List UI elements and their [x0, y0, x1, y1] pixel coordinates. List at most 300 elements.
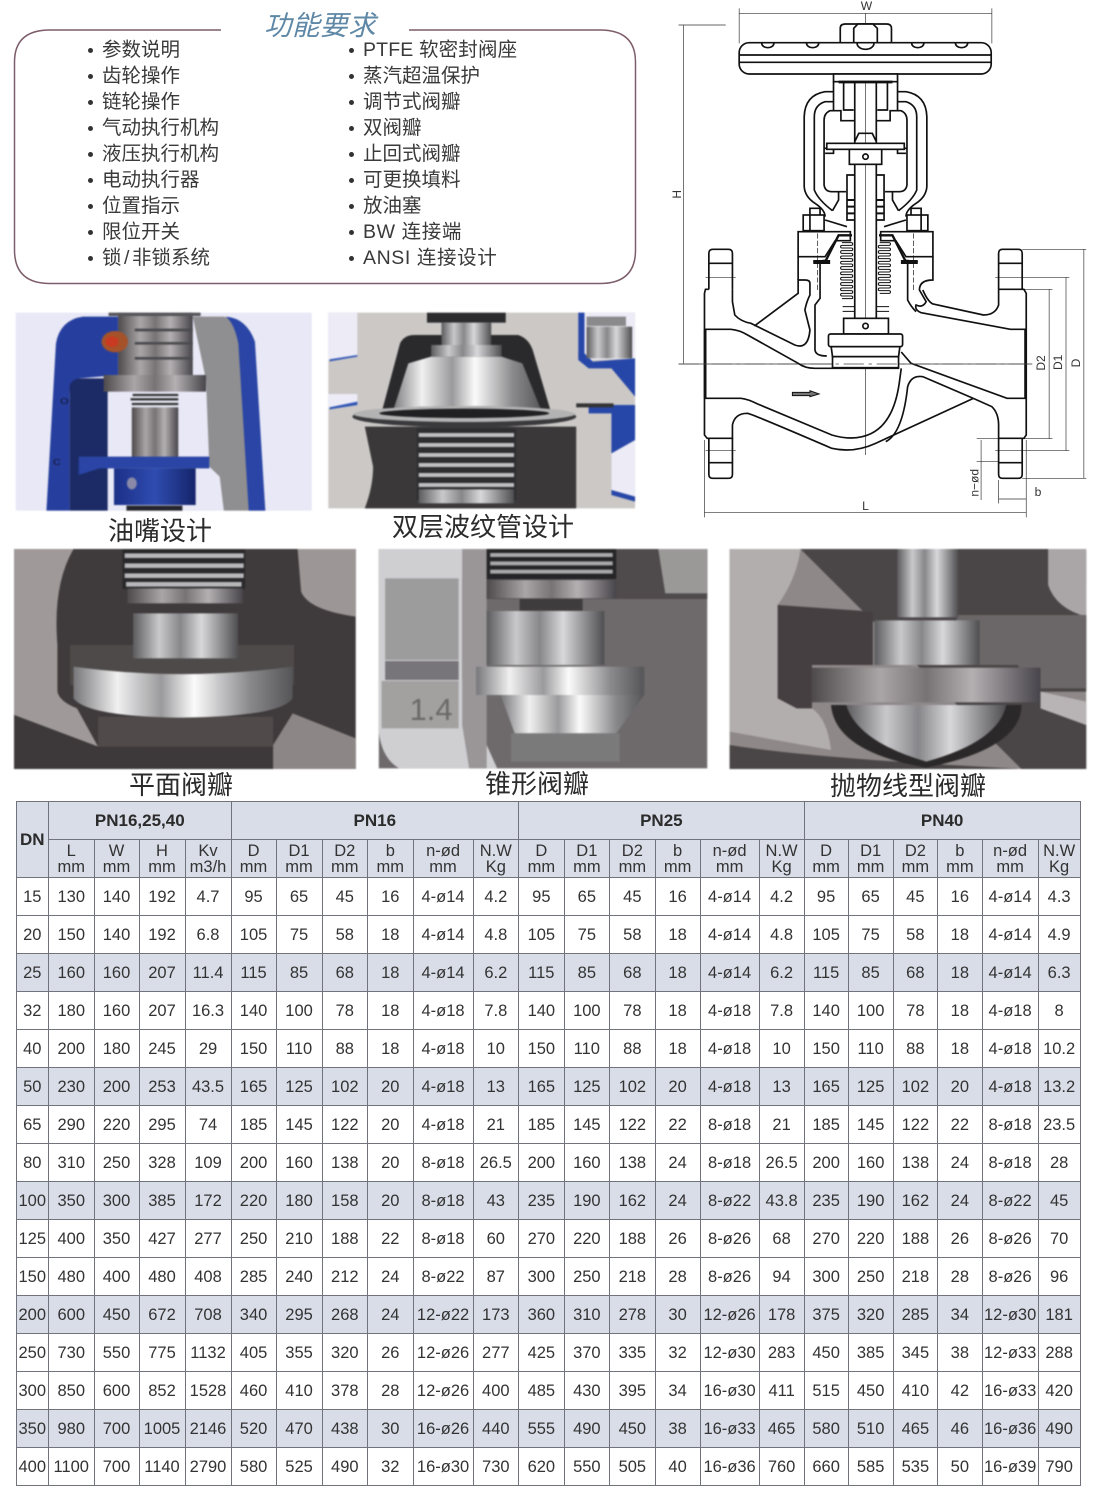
list: right column options: 放油塞	[363, 195, 422, 217]
row: DN 50: 13	[487, 1078, 505, 1096]
row: DN 15: 95	[244, 888, 263, 906]
row: DN 300: 410	[902, 1382, 929, 1400]
row: DN 350: 555	[528, 1420, 555, 1438]
row: DN 40: 110	[286, 1040, 312, 1058]
table header: columns and units: Kg	[486, 858, 506, 876]
row: DN 80: 20	[381, 1154, 399, 1172]
row: DN 250: 12-ø33	[984, 1344, 1036, 1362]
row: DN 15: 45	[336, 888, 354, 906]
row: DN 100: 162	[902, 1192, 929, 1210]
row: DN 250: 405	[240, 1344, 267, 1362]
row: DN 400: 1100	[54, 1458, 89, 1476]
row: DN 80: 328	[148, 1154, 176, 1172]
table header: columns and units: mm	[996, 858, 1024, 876]
caption: conical valve disc: 锥形阀瓣	[485, 769, 589, 799]
row: DN 300: 430	[573, 1382, 601, 1400]
list: right column options: 双阀瓣	[363, 117, 422, 139]
row: DN 150: 24	[381, 1268, 399, 1286]
row: DN 350: 438	[331, 1420, 359, 1438]
row: DN 65: 21	[487, 1116, 505, 1134]
row: DN 80: 24	[668, 1154, 687, 1172]
photo row: oil nozzle and double bellows	[16, 312, 636, 512]
row: DN 350: 580	[812, 1420, 840, 1438]
row: DN 65	[23, 1116, 1075, 1134]
row: DN 150: 96	[1050, 1268, 1068, 1286]
row: DN 300: 28	[381, 1382, 399, 1400]
row: DN 65: 220	[103, 1116, 130, 1134]
row: DN 15: 4-ø14	[708, 888, 751, 906]
row: DN 125: 26	[668, 1230, 687, 1248]
table header: pressure groups: PN16,25,40	[95, 811, 185, 830]
row: DN 80: 138	[619, 1154, 646, 1172]
row: DN 80: 8-ø18	[989, 1154, 1032, 1172]
row: DN 32	[23, 1002, 1064, 1020]
row: DN 125: 188	[331, 1230, 359, 1248]
table header: columns and units: mm	[103, 858, 130, 876]
row: DN 400: 700	[103, 1458, 130, 1476]
row: DN 50: 20	[381, 1078, 399, 1096]
row: DN 40: 150	[528, 1040, 555, 1058]
row: DN 300: 34	[668, 1382, 687, 1400]
photo row: valve discs	[13, 548, 1088, 770]
row: DN 65: 8-ø18	[708, 1116, 751, 1134]
row: DN 125: 8-ø26	[708, 1230, 751, 1248]
row: DN 25: 6.2	[770, 964, 793, 982]
table header: columns and units: H	[156, 842, 168, 860]
row: DN 80: 310	[57, 1154, 85, 1172]
row: DN 350: 350	[18, 1420, 46, 1438]
row: DN 350: 16-ø36	[984, 1420, 1036, 1438]
row: DN 200: 285	[902, 1306, 929, 1324]
table header: pressure groups: PN40	[921, 811, 963, 830]
dimension labels: n−ød	[967, 469, 981, 497]
row: DN 80: 250	[103, 1154, 130, 1172]
row: DN 20: 6.8	[197, 926, 219, 944]
row: DN 300: 420	[1045, 1382, 1073, 1400]
row: DN 20: 4-ø14	[708, 926, 751, 944]
table header: columns and units: N.W	[480, 842, 512, 860]
row: DN 20: 105	[528, 926, 555, 944]
row: DN 300: 850	[57, 1382, 85, 1400]
row: DN 100: 172	[194, 1192, 222, 1210]
row: DN 400: 660	[812, 1458, 840, 1476]
row: DN 20: 75	[861, 926, 880, 944]
dimension labels	[670, 0, 1083, 513]
row: DN 400: 16-ø30	[417, 1458, 469, 1476]
row: DN 65: 295	[148, 1116, 176, 1134]
row: DN 20: 75	[290, 926, 308, 944]
row: DN 25: 160	[57, 964, 85, 982]
row: DN 250: 283	[768, 1344, 795, 1362]
row: DN 125: 210	[285, 1230, 313, 1248]
row: DN 125: 26	[951, 1230, 969, 1248]
row: DN 15: 4.3	[1048, 888, 1071, 906]
row: DN 100: 8-ø22	[989, 1192, 1032, 1210]
row: DN 32: 4-ø18	[421, 1002, 465, 1020]
row: DN 32: 32	[23, 1002, 41, 1020]
row: DN 80: 160	[285, 1154, 313, 1172]
flow direction arrow	[792, 391, 819, 397]
row: DN 15: 65	[861, 888, 880, 906]
row: DN 250: 775	[148, 1344, 176, 1362]
row: DN 150: 8-ø26	[989, 1268, 1032, 1286]
row: DN 400: 16-ø36	[703, 1458, 756, 1476]
row: DN 32: 8	[1055, 1002, 1064, 1020]
row: DN 150: 250	[573, 1268, 601, 1286]
photo: flat valve disc	[14, 549, 356, 769]
row: DN 40: 150	[812, 1040, 840, 1058]
row: DN 15: 4.2	[484, 888, 507, 906]
table header: columns and units: mm	[902, 858, 929, 876]
row: DN 400: 490	[331, 1458, 359, 1476]
diagram: globe valve cross-section with dimensions	[670, 0, 1086, 518]
row: DN 200: 34	[951, 1306, 969, 1324]
row: DN 400: 535	[902, 1458, 929, 1476]
table header: columns and units: mm	[619, 858, 646, 876]
row: DN 25: 4-ø14	[989, 964, 1032, 982]
row: DN 125: 427	[148, 1230, 176, 1248]
row: DN 400: 760	[768, 1458, 795, 1476]
row: DN 50	[17, 1068, 1080, 1105]
row: DN 65: 122	[902, 1116, 929, 1134]
row: DN 20: 18	[951, 926, 969, 944]
row: DN 40: 18	[381, 1040, 399, 1058]
row: DN 250: 1132	[190, 1344, 226, 1362]
row: DN 125: 220	[857, 1230, 884, 1248]
table header: columns and units: D1	[288, 842, 310, 860]
caption: oil nozzle design: 油嘴设计	[108, 516, 212, 546]
row: DN 200: 268	[331, 1306, 359, 1324]
row: DN 125: 270	[528, 1230, 555, 1248]
row: DN 15: 16	[668, 888, 687, 906]
row: DN 65: 65	[23, 1116, 41, 1134]
row: DN 300: 1528	[190, 1382, 226, 1400]
row: DN 250: 12-ø26	[417, 1344, 469, 1362]
dimension labels: b	[1035, 485, 1042, 499]
row: DN 350: 510	[857, 1420, 884, 1438]
list: right column options	[349, 39, 517, 269]
row: DN 32: 7.8	[770, 1002, 793, 1020]
row: DN 65: 8-ø18	[989, 1116, 1032, 1134]
list: left column options: 参数说明	[102, 39, 180, 61]
list: right column options: 止回式阀瓣	[363, 143, 461, 165]
row: DN 15: 4.2	[770, 888, 793, 906]
row: DN 15: 65	[578, 888, 596, 906]
row: DN 32: 140	[240, 1002, 267, 1020]
row: DN 40: 4-ø18	[421, 1040, 465, 1058]
row: DN 80: 26.5	[480, 1154, 512, 1172]
table header: columns and units: D2	[905, 842, 926, 860]
row: DN 150: 8-ø22	[421, 1268, 465, 1286]
caption: flat valve disc: 平面阀瓣	[129, 770, 233, 800]
row: DN 150: 400	[103, 1268, 130, 1286]
row: DN 15: 16	[951, 888, 969, 906]
row: DN 150: 240	[285, 1268, 313, 1286]
row: DN 65: 4-ø18	[421, 1116, 465, 1134]
row: DN 40: 40	[23, 1040, 41, 1058]
row: DN 40: 10	[772, 1040, 791, 1058]
row: DN 125: 60	[487, 1230, 505, 1248]
table header: columns and units: n-ød	[713, 842, 747, 860]
row: DN 200: 173	[482, 1306, 510, 1324]
row: DN 350: 46	[951, 1420, 969, 1438]
row: DN 40: 150	[240, 1040, 267, 1058]
dimension labels: L	[862, 499, 869, 513]
row: DN 65: 21	[772, 1116, 791, 1134]
row: DN 80: 138	[331, 1154, 359, 1172]
row: DN 15: 140	[103, 888, 130, 906]
row: DN 80: 109	[194, 1154, 222, 1172]
row: DN 32: 140	[528, 1002, 555, 1020]
row: DN 25: 11.4	[193, 964, 223, 982]
row: DN 200: 600	[57, 1306, 85, 1324]
row: DN 150: 212	[331, 1268, 359, 1286]
row: DN 100: 162	[619, 1192, 646, 1210]
row: DN 50: 4-ø18	[421, 1078, 465, 1096]
row: DN 250: 288	[1045, 1344, 1073, 1362]
table header: columns and units: mm	[946, 858, 974, 876]
row: DN 25: 115	[240, 964, 267, 982]
row: DN 80: 24	[951, 1154, 969, 1172]
row: DN 350: 465	[902, 1420, 929, 1438]
row: DN 125: 270	[812, 1230, 840, 1248]
row: DN 200: 200	[18, 1306, 46, 1324]
caption: parabolic valve disc: 抛物线型阀瓣	[830, 771, 986, 801]
row: DN 25: 18	[381, 964, 399, 982]
row: DN 65: 185	[528, 1116, 555, 1134]
table header: pressure groups: DN	[20, 830, 45, 849]
table header: columns and units: mm	[331, 858, 359, 876]
row: DN 350: 16-ø26	[417, 1420, 469, 1438]
row: DN 32: 18	[668, 1002, 687, 1020]
valve body	[704, 249, 1026, 478]
table header: columns and units: m3/h	[190, 858, 226, 876]
row: DN 150: 8-ø26	[708, 1268, 751, 1286]
row: DN 200: 340	[240, 1306, 267, 1324]
row: DN 25: 85	[578, 964, 596, 982]
row: DN 250: 320	[331, 1344, 359, 1362]
row: DN 250: 730	[57, 1344, 85, 1362]
row: DN 250: 345	[902, 1344, 929, 1362]
row: DN 100: 20	[381, 1192, 399, 1210]
centre line dash	[679, 363, 1032, 365]
table header: columns and units: D	[248, 842, 260, 860]
list: left column options: 位置指示	[102, 195, 180, 217]
row: DN 200: 320	[857, 1306, 884, 1324]
row: DN 250: 385	[857, 1344, 884, 1362]
dimension labels: D2	[1034, 355, 1048, 371]
dimension labels: D1	[1051, 354, 1065, 370]
row: DN 15: 16	[381, 888, 399, 906]
row: DN 200: 310	[573, 1306, 601, 1324]
row: DN 50: 253	[148, 1078, 176, 1096]
table header: pressure groups: PN25	[640, 811, 683, 830]
list: right column options: BW 连接端	[363, 221, 462, 243]
row: DN 300: 411	[768, 1382, 795, 1400]
row: DN 32: 140	[812, 1002, 840, 1020]
row: DN 125: 125	[18, 1230, 46, 1248]
row: DN 25: 115	[813, 964, 839, 982]
row: DN 100: 24	[951, 1192, 969, 1210]
row: DN 20: 18	[381, 926, 399, 944]
list: left column options: 限位开关	[102, 221, 180, 243]
row: DN 150: 285	[240, 1268, 267, 1286]
row: DN 15: 4-ø14	[421, 888, 465, 906]
row: DN 150: 300	[812, 1268, 840, 1286]
row: DN 25: 207	[148, 964, 176, 982]
row: DN 300: 12-ø26	[417, 1382, 469, 1400]
row: DN 350: 465	[768, 1420, 795, 1438]
row: DN 400: 40	[668, 1458, 687, 1476]
row: DN 350: 470	[285, 1420, 313, 1438]
row: DN 300: 16-ø33	[984, 1382, 1036, 1400]
row: DN 125: 188	[902, 1230, 929, 1248]
table header: columns and units: mm	[58, 858, 85, 876]
row: DN 40	[23, 1040, 1075, 1058]
row: DN 400: 50	[951, 1458, 969, 1476]
row: DN 100	[17, 1182, 1080, 1219]
row: DN 250: 355	[285, 1344, 313, 1362]
photo: oil nozzle design: O	[60, 397, 69, 407]
row: DN 350: 440	[482, 1420, 510, 1438]
row: DN 200: 181	[1045, 1306, 1073, 1324]
list: left column options: 电动执行器	[102, 169, 200, 191]
row: DN 250: 335	[619, 1344, 646, 1362]
row: DN 125: 220	[573, 1230, 601, 1248]
row: DN 65: 22	[951, 1116, 969, 1134]
row: DN 150: 480	[57, 1268, 85, 1286]
row: DN 40: 4-ø18	[708, 1040, 751, 1058]
table header: columns and units: mm	[429, 858, 457, 876]
row: DN 300: 300	[18, 1382, 46, 1400]
row: DN 125: 400	[57, 1230, 85, 1248]
row: DN 125: 250	[240, 1230, 267, 1248]
table header: columns and units: b	[386, 842, 395, 860]
row: DN 25: 18	[668, 964, 687, 982]
row: DN 80	[23, 1154, 1068, 1172]
row: DN 40: 10	[487, 1040, 505, 1058]
row: DN 200: 278	[619, 1306, 646, 1324]
row: DN 300: 515	[812, 1382, 840, 1400]
row: DN 32: 207	[148, 1002, 176, 1020]
row: DN 250: 26	[381, 1344, 399, 1362]
list: right column options: ANSI 连接设计	[363, 247, 497, 269]
row: DN 125: 8-ø18	[421, 1230, 465, 1248]
list: left column options: 锁/非锁系统	[102, 247, 210, 269]
row: DN 20: 58	[623, 926, 642, 944]
row: DN 80: 200	[812, 1154, 840, 1172]
table header: columns and units: D	[535, 842, 547, 860]
row: DN 32: 18	[381, 1002, 399, 1020]
table header: columns and units: N.W	[766, 842, 798, 860]
row: DN 100: 235	[528, 1192, 555, 1210]
row: DN 150: 28	[668, 1268, 687, 1286]
row: DN 80: 80	[23, 1154, 41, 1172]
table header: columns and units: Kg	[1049, 858, 1069, 876]
table header: columns and units: mm	[812, 858, 840, 876]
row: DN 250: 12-ø30	[703, 1344, 756, 1362]
photo: conical valve disc	[379, 549, 707, 768]
row: DN 100: 190	[573, 1192, 601, 1210]
dimension labels: D	[1069, 358, 1083, 367]
list: left column options	[88, 39, 219, 269]
row: DN 125: 8-ø26	[989, 1230, 1032, 1248]
row: DN 20: 150	[57, 926, 85, 944]
row: DN 65: 145	[857, 1116, 884, 1134]
caption: double-layer bellows design: 双层波纹管设计	[392, 512, 574, 542]
row: DN 400: 550	[573, 1458, 601, 1476]
row: DN 40: 180	[103, 1040, 130, 1058]
row: DN 20: 18	[668, 926, 687, 944]
row: DN 350: 38	[668, 1420, 687, 1438]
row: DN 300: 600	[103, 1382, 130, 1400]
yoke and stem	[804, 82, 927, 318]
row: DN 125: 22	[381, 1230, 399, 1248]
row: DN 200: 360	[528, 1306, 555, 1324]
list: left column options: 气动执行机构	[102, 117, 219, 139]
row: DN 50: 20	[951, 1078, 969, 1096]
table: valve dimensions	[16, 801, 1081, 1486]
table header: columns and units: mm	[285, 858, 313, 876]
row: DN 350: 700	[103, 1420, 130, 1438]
row: DN 40: 88	[623, 1040, 642, 1058]
row: DN 100: 43.8	[766, 1192, 798, 1210]
row: DN 80: 200	[240, 1154, 267, 1172]
row: DN 250: 277	[482, 1344, 510, 1362]
row: DN 15: 95	[817, 888, 835, 906]
row: DN 25: 68	[623, 964, 642, 982]
row: DN 400	[18, 1458, 1073, 1476]
row: DN 32: 100	[285, 1002, 313, 1020]
row: DN 80: 200	[528, 1154, 555, 1172]
row: DN 40: 245	[148, 1040, 176, 1058]
row: DN 32: 78	[336, 1002, 354, 1020]
row: DN 50: 165	[240, 1078, 267, 1096]
row: DN 100: 235	[812, 1192, 840, 1210]
row: DN 40: 18	[668, 1040, 687, 1058]
row: DN 400: 32	[381, 1458, 399, 1476]
table header: columns and units: b	[955, 842, 964, 860]
table header: columns and units: Kv	[198, 842, 218, 860]
row: DN 200: 708	[194, 1306, 222, 1324]
row: DN 250: 370	[573, 1344, 601, 1362]
list: left column options: 链轮操作	[102, 91, 180, 113]
row: DN 20: 4.8	[770, 926, 793, 944]
photo: oil nozzle design: C	[53, 458, 61, 468]
row: DN 150	[18, 1268, 1068, 1286]
row: DN 300: 410	[285, 1382, 313, 1400]
row: DN 150: 28	[951, 1268, 969, 1286]
row: DN 20: 58	[906, 926, 925, 944]
table header: pressure groups: PN16	[354, 811, 396, 830]
row: DN 50: 13.2	[1043, 1078, 1075, 1096]
row: DN 40: 200	[57, 1040, 85, 1058]
row: DN 150: 218	[619, 1268, 646, 1286]
row: DN 25: 6.2	[484, 964, 507, 982]
row: DN 25: 4-ø14	[421, 964, 465, 982]
row: DN 80: 26.5	[766, 1154, 798, 1172]
row: DN 100: 43	[487, 1192, 505, 1210]
row: DN 250: 38	[951, 1344, 969, 1362]
table header: columns and units: D1	[576, 842, 597, 860]
row: DN 350: 980	[57, 1420, 85, 1438]
row: DN 300: 460	[240, 1382, 267, 1400]
row: DN 200: 450	[103, 1306, 130, 1324]
row: DN 15: 192	[148, 888, 176, 906]
flange bolts	[709, 249, 732, 289]
row: DN 300: 400	[482, 1382, 510, 1400]
row: DN 20: 4-ø14	[989, 926, 1032, 944]
